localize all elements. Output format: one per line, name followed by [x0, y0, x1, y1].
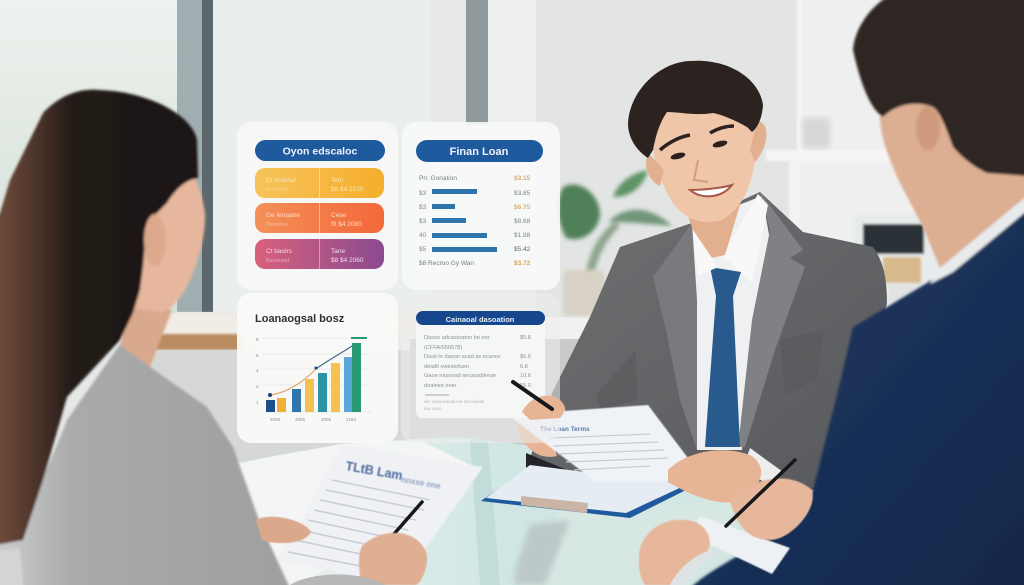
clipboard on table [481, 465, 690, 518]
document held by woman: TLtB Lam [344, 459, 404, 483]
panel heading: Cainaoal dasoation [446, 315, 515, 324]
schedule row 1: Tem [331, 177, 343, 184]
schedule row 3 [255, 239, 384, 269]
woman on left [0, 90, 295, 585]
table footer: $3.72 [514, 260, 531, 267]
man on right [680, 0, 1024, 585]
table header [419, 175, 531, 182]
document held by man [508, 405, 688, 482]
bar rows: $1.88 [514, 232, 531, 239]
schedule row 2: Ge fenaane [266, 212, 300, 219]
table header: $3.15 [514, 175, 531, 182]
panel heading: Finan Loan [450, 146, 509, 158]
bar chart: 4 [256, 368, 259, 373]
ear [144, 214, 166, 266]
blazer [0, 340, 295, 585]
neck and face [880, 80, 1024, 268]
man's left hand and pen [512, 381, 565, 457]
bar rows: $6.75 [514, 204, 531, 211]
neck [684, 205, 740, 258]
fine print [424, 399, 484, 411]
bar chart [256, 337, 372, 422]
cost list: 10.6 [520, 373, 531, 379]
bar rows [419, 189, 531, 253]
cost list: 55.0 [520, 383, 531, 389]
cost list: 6.8 [520, 364, 528, 370]
ear [916, 106, 940, 150]
fine print: wer eadoneanoa ear eocoadoas [424, 399, 484, 404]
face [135, 150, 205, 312]
panel heading: Oyon edscaloc [283, 146, 358, 158]
bar rows: $3 [419, 190, 427, 197]
bar rows: $3 [419, 204, 427, 211]
panel: cost breakdown [401, 293, 560, 443]
bar chart: 2005 [270, 417, 281, 422]
bar rows: $3 [419, 218, 427, 225]
cost list: (CFFA/650578) [424, 345, 462, 351]
schedule row 3: Ct baoirs [266, 248, 293, 255]
tie [705, 267, 741, 447]
bar chart: 6 [256, 353, 259, 358]
woman's hands and pen [256, 502, 427, 585]
table header: Pn: Gonation [419, 175, 457, 182]
man's right hand and cuff [668, 448, 783, 503]
cost list: Dasit to daoon acad as ecanov [424, 354, 501, 360]
bar rows: $8.68 [514, 218, 531, 225]
cost list: Dasoo adcastoaton be eor [424, 335, 490, 341]
bar chart: 1 [256, 400, 259, 405]
document under man's hand on right [690, 516, 790, 574]
schedule row 3: Tane [331, 248, 345, 255]
schedule row 3: $8 $4 2060 [331, 257, 364, 264]
glass table [232, 438, 860, 585]
right man's hands and pen [639, 460, 813, 585]
panel heading [255, 140, 385, 161]
cost list: $5.8 [520, 335, 531, 341]
bar rows: $3.85 [514, 190, 531, 197]
desk items on right [854, 214, 952, 302]
bar chart: 2164 [346, 417, 357, 422]
potted plant [558, 170, 672, 316]
schedule row 1: Ct erannal [266, 177, 297, 184]
neck [120, 300, 172, 367]
table footer [419, 260, 531, 267]
panel: loan schedule [237, 122, 398, 290]
cost list [424, 335, 531, 389]
cost list: detallt ewestofuen [424, 364, 469, 370]
panel heading [416, 311, 545, 325]
panel: finance loan [402, 122, 560, 290]
bar rows: $5 [419, 246, 427, 253]
suit [680, 200, 1024, 585]
man in centre [526, 192, 887, 490]
pocket and shadow [780, 330, 824, 395]
bar rows: $5.42 [514, 246, 531, 253]
schedule row 2: f8 $4 2080 [331, 221, 362, 228]
collar [930, 180, 1024, 284]
hair [0, 90, 198, 548]
table footer: $8 Recroo Gy Wan [419, 260, 474, 267]
panel heading [416, 140, 543, 162]
left lapel [653, 223, 697, 450]
schedule row 1: Rexinton [266, 187, 288, 193]
bar chart: 8 [256, 337, 259, 342]
schedule row 3: Banmsad [266, 258, 289, 264]
panel: growth chart [237, 293, 398, 443]
document held by man: The Loan Terms [540, 426, 590, 433]
schedule row 1 [255, 168, 384, 198]
bar chart: 2005 [321, 417, 332, 422]
bar chart: 2 [256, 384, 259, 389]
bar chart: 2005 [295, 417, 306, 422]
shirt [692, 196, 770, 450]
right lapel [738, 192, 805, 447]
jacket [526, 192, 887, 490]
schedule row 2: Cese [331, 212, 347, 219]
hair [853, 0, 1024, 177]
schedule row 2: Dexinton [266, 222, 288, 228]
document held by woman [277, 444, 483, 585]
bar rows: 40 [419, 232, 427, 239]
hand and pen in front of cost panel [513, 382, 564, 420]
fine print: dao oeao [424, 406, 442, 411]
schedule row 1: $8 $4 2130 [331, 186, 364, 193]
lower room: sill and wall [134, 313, 438, 335]
schedule row 2 [255, 203, 384, 233]
cost list: $6.6 [520, 354, 531, 360]
cost list: doaineo ever [424, 383, 456, 389]
shirt edge [0, 548, 25, 585]
document held by woman: nnxxe one [401, 475, 442, 491]
cost list: Gaoe nasonad ancaoablerae [424, 373, 496, 379]
sleeve cuff [526, 453, 567, 474]
man's head and hair [628, 61, 767, 222]
chart heading: Loanaogsal bosz [255, 313, 345, 325]
